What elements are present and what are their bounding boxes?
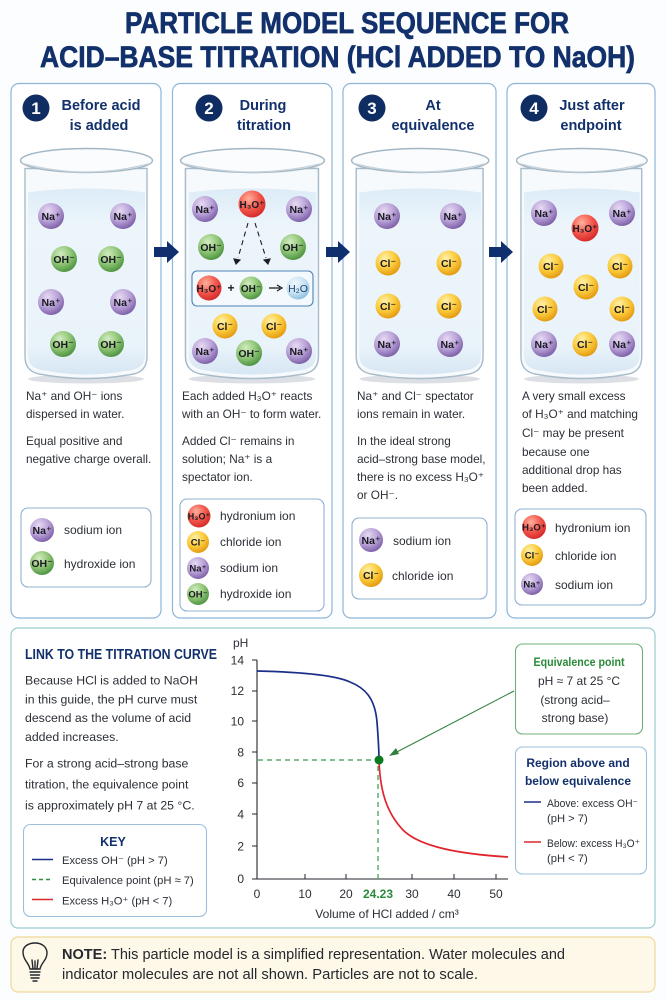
beaker 2 with ions: OH⁻ [200,242,222,254]
step 3 description [357,389,486,502]
step 1 description [26,389,151,466]
panel: step 4 just after endpoint [507,84,655,618]
arrow: step 2 to 3 [326,241,350,263]
reaction box [192,271,313,306]
x axis labels [254,887,503,901]
titration curve chart [231,636,514,921]
beaker 2 with ions: OH⁻ [238,348,260,360]
step 2 legend: OH⁻ [188,590,208,600]
key: Excess OH⁻ (pH > 7) [62,855,168,867]
explanation text: For a strong acid–strong base [25,756,189,770]
beaker 4 with ions: Na⁺ [535,339,553,351]
beaker 4 with ions: Na⁺ [535,208,553,220]
step 1 heading: Before acid [62,98,140,114]
step 1 legend: Na⁺ [33,525,51,537]
step 2 description: Added Cl⁻ remains in [182,434,294,448]
step 3 description: there is no excess H₃O⁺ [357,470,484,484]
y axis labels: 6 [237,776,244,790]
step 1 legend: hydroxide ion [64,557,135,571]
step 2 description [181,389,321,484]
region above and below equivalence box: Below: excess H₃O⁺ [547,838,640,850]
beaker 4 with ions: Cl⁻ [612,261,628,273]
explanation text: titration, the equivalence point [25,778,189,792]
step 4 description [522,389,638,495]
step 4 description: of H₃O⁺ and matching [522,407,638,421]
panel: step 3 at equivalence [343,84,496,618]
beaker 3 with ions: Na⁺ [378,211,396,223]
step 2 description: spectator ion. [182,470,253,484]
step 2 heading [237,98,291,134]
beaker 4 with ions: H₃O⁺ [573,224,597,235]
beaker 1 with ions: OH⁻ [100,339,122,351]
step 4 badge [520,94,548,122]
step 1 legend: OH⁻ [31,558,53,570]
step 3 legend [352,518,487,599]
y axis labels: 4 [237,808,244,822]
step 2 badge: 2 [204,99,214,118]
step 4 description: additional drop has [522,463,622,477]
y axis labels: 12 [231,684,244,698]
step 1 legend [21,508,151,587]
beaker 1 with ions: OH⁻ [100,254,122,266]
panel: step 1 before acid is added [11,84,161,618]
note banner [11,937,655,992]
section heading: LINK TO THE TITRATION CURVE [25,647,217,663]
step 1 heading [62,98,140,134]
explanation text: is approximately pH 7 at 25 °C. [25,798,195,812]
step 1 description: negative charge overall. [26,452,151,466]
x axis labels: 50 [489,887,503,901]
step 1 description: dispersed in water. [26,407,124,421]
step 3 description: Na⁺ and Cl⁻ spectator [357,389,474,403]
region above and below equivalence box [516,747,646,874]
step 2 heading: During [240,98,286,114]
beaker 3 with ions [352,148,489,384]
axis ticks [252,660,496,879]
beaker 4 with ions: Cl⁻ [577,339,593,351]
x axis labels: 10 [298,887,312,901]
step 2 badge [196,94,222,122]
reaction box: OH⁻ [241,284,261,295]
axes [257,660,508,879]
explanation text: in this guide, the pH curve must [25,692,198,706]
y axis labels: 0 [237,872,244,886]
beaker 3 with ions: Na⁺ [378,339,396,351]
equivalence point callout: Equivalence point [534,655,625,669]
beaker 1 with ions: Na⁺ [114,211,132,223]
step 1 heading: is added [70,118,128,134]
beaker 1 with ions: OH⁻ [52,339,74,351]
equivalence point marker [374,756,384,764]
note text: NOTE: This particle model is a simplified representation. Water molecules and [62,947,565,963]
step 4 heading: endpoint [560,118,622,134]
step 3 description: ions remain in water. [357,407,465,421]
beaker 4 with ions: Cl⁻ [614,304,630,316]
key [24,824,206,916]
step 2 legend: chloride ion [220,535,281,549]
step 2 legend: hydronium ion [220,509,295,523]
region above and below equivalence box: Above: excess OH⁻ [547,798,638,810]
x axis labels: 40 [447,887,461,901]
equivalence point callout [516,644,642,734]
equivalence point callout: pH ≈ 7 at 25 °C [538,674,620,688]
step 3 description: or OH⁻. [357,488,398,502]
step 1 badge: 1 [31,99,41,118]
step 3 heading [391,98,475,134]
step 3 legend: sodium ion [393,534,451,548]
beaker 1 with ions: Na⁺ [42,211,60,223]
x axis labels: 20 [339,887,353,901]
beaker 3 with ions: Cl⁻ [441,258,457,270]
reaction box: H₃O⁺ [197,284,221,295]
beaker 2 with ions [181,148,324,384]
step 2 legend [180,499,324,611]
beaker 2 with ions: OH⁻ [282,242,304,254]
region above and below equivalence box: (pH > 7) [547,813,588,825]
beaker 2 with ions: Cl⁻ [266,321,282,333]
note text [62,947,565,983]
step 4 legend: chloride ion [555,549,616,563]
step 2 legend: Na⁺ [189,564,207,574]
step 2 legend: H₃O⁺ [188,512,210,522]
step 4 description: Cl⁻ may be present [522,426,625,440]
step 4 heading: Just after [559,98,625,114]
beaker 4 with ions: Na⁺ [613,208,631,220]
beaker 2 with ions: Na⁺ [290,204,308,216]
step 4 legend [515,509,646,605]
step 4 description: been added. [522,481,588,495]
y axis labels [231,654,244,886]
explanation text [25,674,198,812]
beaker 4 with ions: Na⁺ [613,339,631,351]
red curve below equivalence [379,760,508,857]
equivalence point callout: strong base) [542,711,608,725]
step 4 heading [559,98,625,134]
x axis title: Volume of HCl added / cm³ [315,907,459,921]
title [40,7,635,74]
x axis labels: 30 [405,887,419,901]
region above and below equivalence box: below equivalence [525,774,631,788]
step 3 badge: 3 [367,99,377,118]
step 1 legend: sodium ion [64,523,122,537]
equivalence volume label: 24.23 [363,887,393,901]
x axis labels: 0 [254,887,261,901]
key: KEY [100,835,127,849]
beaker 2 with ions: Cl⁻ [217,321,233,333]
arrow: step 3 to 4 [489,241,513,263]
beaker 3 with ions: Cl⁻ [380,301,396,313]
step 4 description: A very small excess [522,389,626,403]
reaction box: + [227,281,235,295]
step 1 badge [22,94,50,122]
beaker 1 with ions: OH⁻ [53,254,75,266]
equivalence guide lines [258,760,378,879]
beaker 3 with ions: Cl⁻ [380,258,396,270]
y axis labels: 10 [231,714,244,728]
step 4 legend: Cl⁻ [525,550,539,562]
step 4 badge: 4 [529,99,539,118]
step 1 description: Equal positive and [26,434,122,448]
step 2 description: Each added H₃O⁺ reacts [182,389,312,403]
beaker 4 with ions [516,148,647,384]
beaker 4 with ions: Cl⁻ [543,261,559,273]
beaker 3 with ions: Na⁺ [444,211,462,223]
note text: indicator molecules are not all shown. Particles are not to scale. [62,967,478,983]
panel: link to the titration curve [11,628,655,928]
beaker 2 with ions: H₃O⁺ [240,200,264,211]
step 2 description: solution; Na⁺ is a [182,452,273,466]
step 3 legend: Na⁺ [362,535,380,547]
dashed reaction arrows [234,223,270,264]
beaker 1 with ions: Na⁺ [114,297,132,309]
region above and below equivalence box: (pH < 7) [547,853,588,865]
beaker 4 with ions: Cl⁻ [537,304,553,316]
beaker 4 with ions: Cl⁻ [578,282,594,294]
step 4 description: because one [522,445,590,459]
step 2 legend: sodium ion [220,561,278,575]
beaker 3 with ions: Na⁺ [441,339,459,351]
step 1 description: Na⁺ and OH⁻ ions [26,389,122,403]
icon: light bulb [23,943,47,981]
step 4 legend: sodium ion [555,578,613,592]
step 2 heading: titration [237,118,291,134]
y axis labels: 8 [237,746,244,760]
panel: step 2 during titration [172,84,332,618]
explanation text: descend as the volume of acid [25,711,191,725]
explanation text: added increases. [25,730,119,744]
step 4 legend: hydronium ion [555,521,630,535]
title: PARTICLE MODEL SEQUENCE FOR [125,7,569,40]
step 2 legend: hydroxide ion [220,587,291,601]
key: Excess H₃O⁺ (pH < 7) [62,896,173,908]
region above and below equivalence box: Region above and [526,756,630,770]
y axis title: pH [233,636,248,650]
arrow: step 1 to 2 [154,241,179,263]
reaction box: H₂O [288,283,308,295]
beaker 1 with ions [20,148,152,384]
step 4 legend: Na⁺ [523,580,541,590]
y axis labels: 2 [237,840,244,854]
step 2 legend: Cl⁻ [191,538,205,548]
arrow to equivalence point [389,691,514,756]
step 3 legend: chloride ion [392,569,453,583]
blue curve above equivalence [257,671,379,760]
y axis labels: 14 [231,654,244,668]
step 3 heading: equivalence [391,118,475,134]
beaker 1 with ions: Na⁺ [42,297,60,309]
beaker 2 with ions: Na⁺ [196,346,214,358]
key: Equivalence point (pH ≈ 7) [62,875,194,887]
step 3 description: acid–strong base model, [357,452,486,466]
beaker 3 with ions: Cl⁻ [441,301,457,313]
equivalence point callout: (strong acid– [540,693,610,707]
explanation text: Because HCl is added to NaOH [25,674,198,688]
step 3 heading: At [425,98,441,114]
beaker 2 with ions: Na⁺ [196,204,214,216]
beaker 2 with ions: Na⁺ [290,346,308,358]
step 2 description: with an OH⁻ to form water. [181,407,321,421]
step 4 legend: H₃O⁺ [522,522,546,534]
step 3 description: In the ideal strong [357,434,451,448]
step 3 legend: Cl⁻ [363,570,379,582]
step 3 badge [358,94,386,122]
